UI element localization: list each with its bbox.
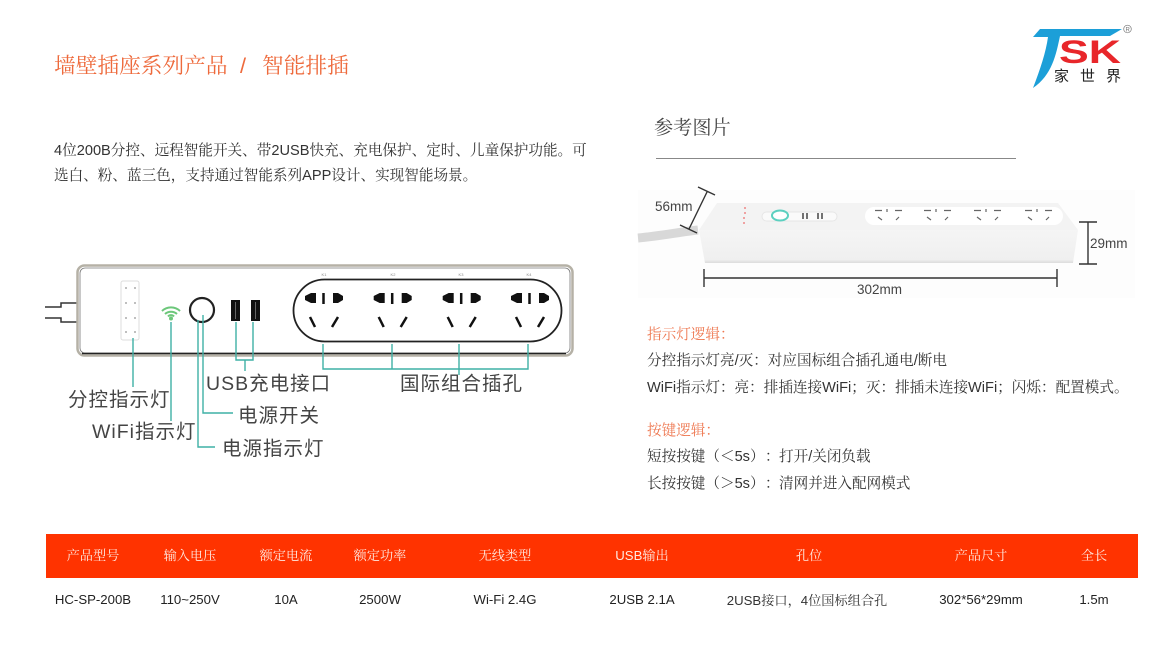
outlet 3: [443, 293, 481, 327]
intro text: [54, 142, 587, 184]
outlet labels: [322, 272, 532, 277]
spec table: Wi-Fi 2.4G: [473, 592, 537, 607]
power button: [190, 298, 214, 322]
title: [54, 53, 349, 78]
callout labels: [68, 373, 523, 460]
heading: reference image: 参考图片: [654, 118, 731, 139]
spec table: 产品尺寸: [955, 548, 1007, 563]
intro text: 4位200B分控、远程智能开关、带2USB快充、充电保护、定时、儿童保护功能。可: [54, 143, 587, 159]
button logic: [647, 422, 910, 492]
socket holes 3: [974, 209, 1001, 220]
outlet labels: K2: [391, 272, 396, 277]
spec table: 302*56*29mm: [939, 592, 1023, 607]
spec table: 额定功率: [354, 548, 406, 563]
button line 1: 短按按键（＜5s）: [647, 449, 765, 465]
button line 2: [647, 475, 910, 492]
callout labels: USB充电接口: [206, 373, 331, 395]
outlet 1: [305, 293, 343, 327]
outlet labels: K1: [322, 272, 327, 277]
button line 1: ：: [765, 449, 780, 465]
logo: SK: [1059, 34, 1121, 70]
callout labels: WiFi指示灯: [92, 421, 196, 443]
indicator panel: [121, 281, 139, 340]
spec table: 2USB接口，4位国标组合孔: [727, 593, 887, 608]
spec table: 额定电流: [260, 548, 312, 563]
outlet 2: [374, 293, 412, 327]
button panel: [762, 212, 837, 221]
cord: [638, 230, 698, 238]
spec table: 1.5m: [1079, 592, 1109, 607]
logo: R: [1126, 28, 1130, 34]
divider under heading: [656, 158, 1016, 159]
spec table: 10A: [274, 592, 298, 607]
strip outline: [78, 266, 572, 356]
wifi icon: [162, 307, 180, 320]
spec table: 孔位: [796, 548, 822, 563]
title: 智能排插: [262, 53, 349, 78]
usb ports: [231, 300, 260, 321]
outlet panel: [865, 207, 1063, 225]
spec table: 2USB 2.1A: [609, 592, 675, 607]
dimension labels: 56mm: [655, 199, 693, 214]
led dots: [743, 207, 746, 224]
title: /: [240, 53, 246, 78]
socket holes 2: [924, 209, 951, 220]
spec table header: [46, 534, 1138, 578]
outlet labels: K4: [527, 272, 532, 277]
dimension labels: 302mm: [857, 282, 902, 297]
intro text: 选白、粉、蓝三色，支持通过智能系列APP设计、实现智能场景。: [54, 168, 477, 184]
button line 2: 清网并进入配网模式: [779, 476, 910, 492]
logo: [1033, 24, 1132, 88]
usb slots: [803, 213, 822, 219]
spec table: 无线类型: [479, 548, 531, 563]
callout labels: 分控指示灯: [68, 389, 171, 411]
callout labels: 国际组合插孔: [400, 373, 523, 395]
button line 1: 打开/关闭负载: [779, 449, 871, 465]
dimension lines: [680, 187, 1097, 287]
outlet capsule: [294, 280, 562, 342]
spec table: 输入电压: [164, 548, 216, 563]
spec table: 产品型号: [67, 548, 119, 563]
socket holes 1: [875, 209, 902, 220]
button line 2: ：: [765, 476, 780, 492]
outlet 4: [511, 293, 549, 327]
spec table: 110~250V: [160, 592, 220, 607]
dimension labels: [655, 199, 1128, 297]
callout labels: 电源开关: [238, 405, 320, 427]
callout labels: 电源指示灯: [222, 438, 325, 460]
spec table: 全长: [1081, 548, 1107, 563]
title: 墙壁插座系列产品: [54, 53, 228, 78]
spec table: [55, 548, 1109, 608]
dimension labels: 29mm: [1090, 236, 1128, 251]
indicator heading: 指示灯逻辑：: [647, 327, 735, 343]
button line 1: [647, 448, 871, 465]
teal callout lines: [133, 315, 528, 447]
teal button: [772, 210, 788, 220]
button heading: 按键逻辑：: [647, 423, 720, 439]
spec table: USB输出: [615, 548, 669, 563]
strip body: [699, 230, 1078, 263]
power cord: [45, 303, 77, 322]
socket holes 4: [1025, 209, 1052, 220]
outlet labels: K3: [459, 272, 464, 277]
indicator line 2: WiFi指示灯：亮：排插连接WiFi；灭：排插未连接WiFi；闪烁：配置模式。: [647, 380, 1129, 396]
logo: 家世界: [1054, 68, 1132, 85]
indicator logic: [647, 326, 1129, 396]
indicator line 1: 分控指示灯亮/灭：对应国标组合插孔通电/断电: [647, 353, 947, 369]
spec table: 2500W: [359, 592, 401, 607]
spec table: HC-SP-200B: [55, 592, 131, 607]
button line 2: 长按按键（＞5s）: [647, 476, 765, 492]
